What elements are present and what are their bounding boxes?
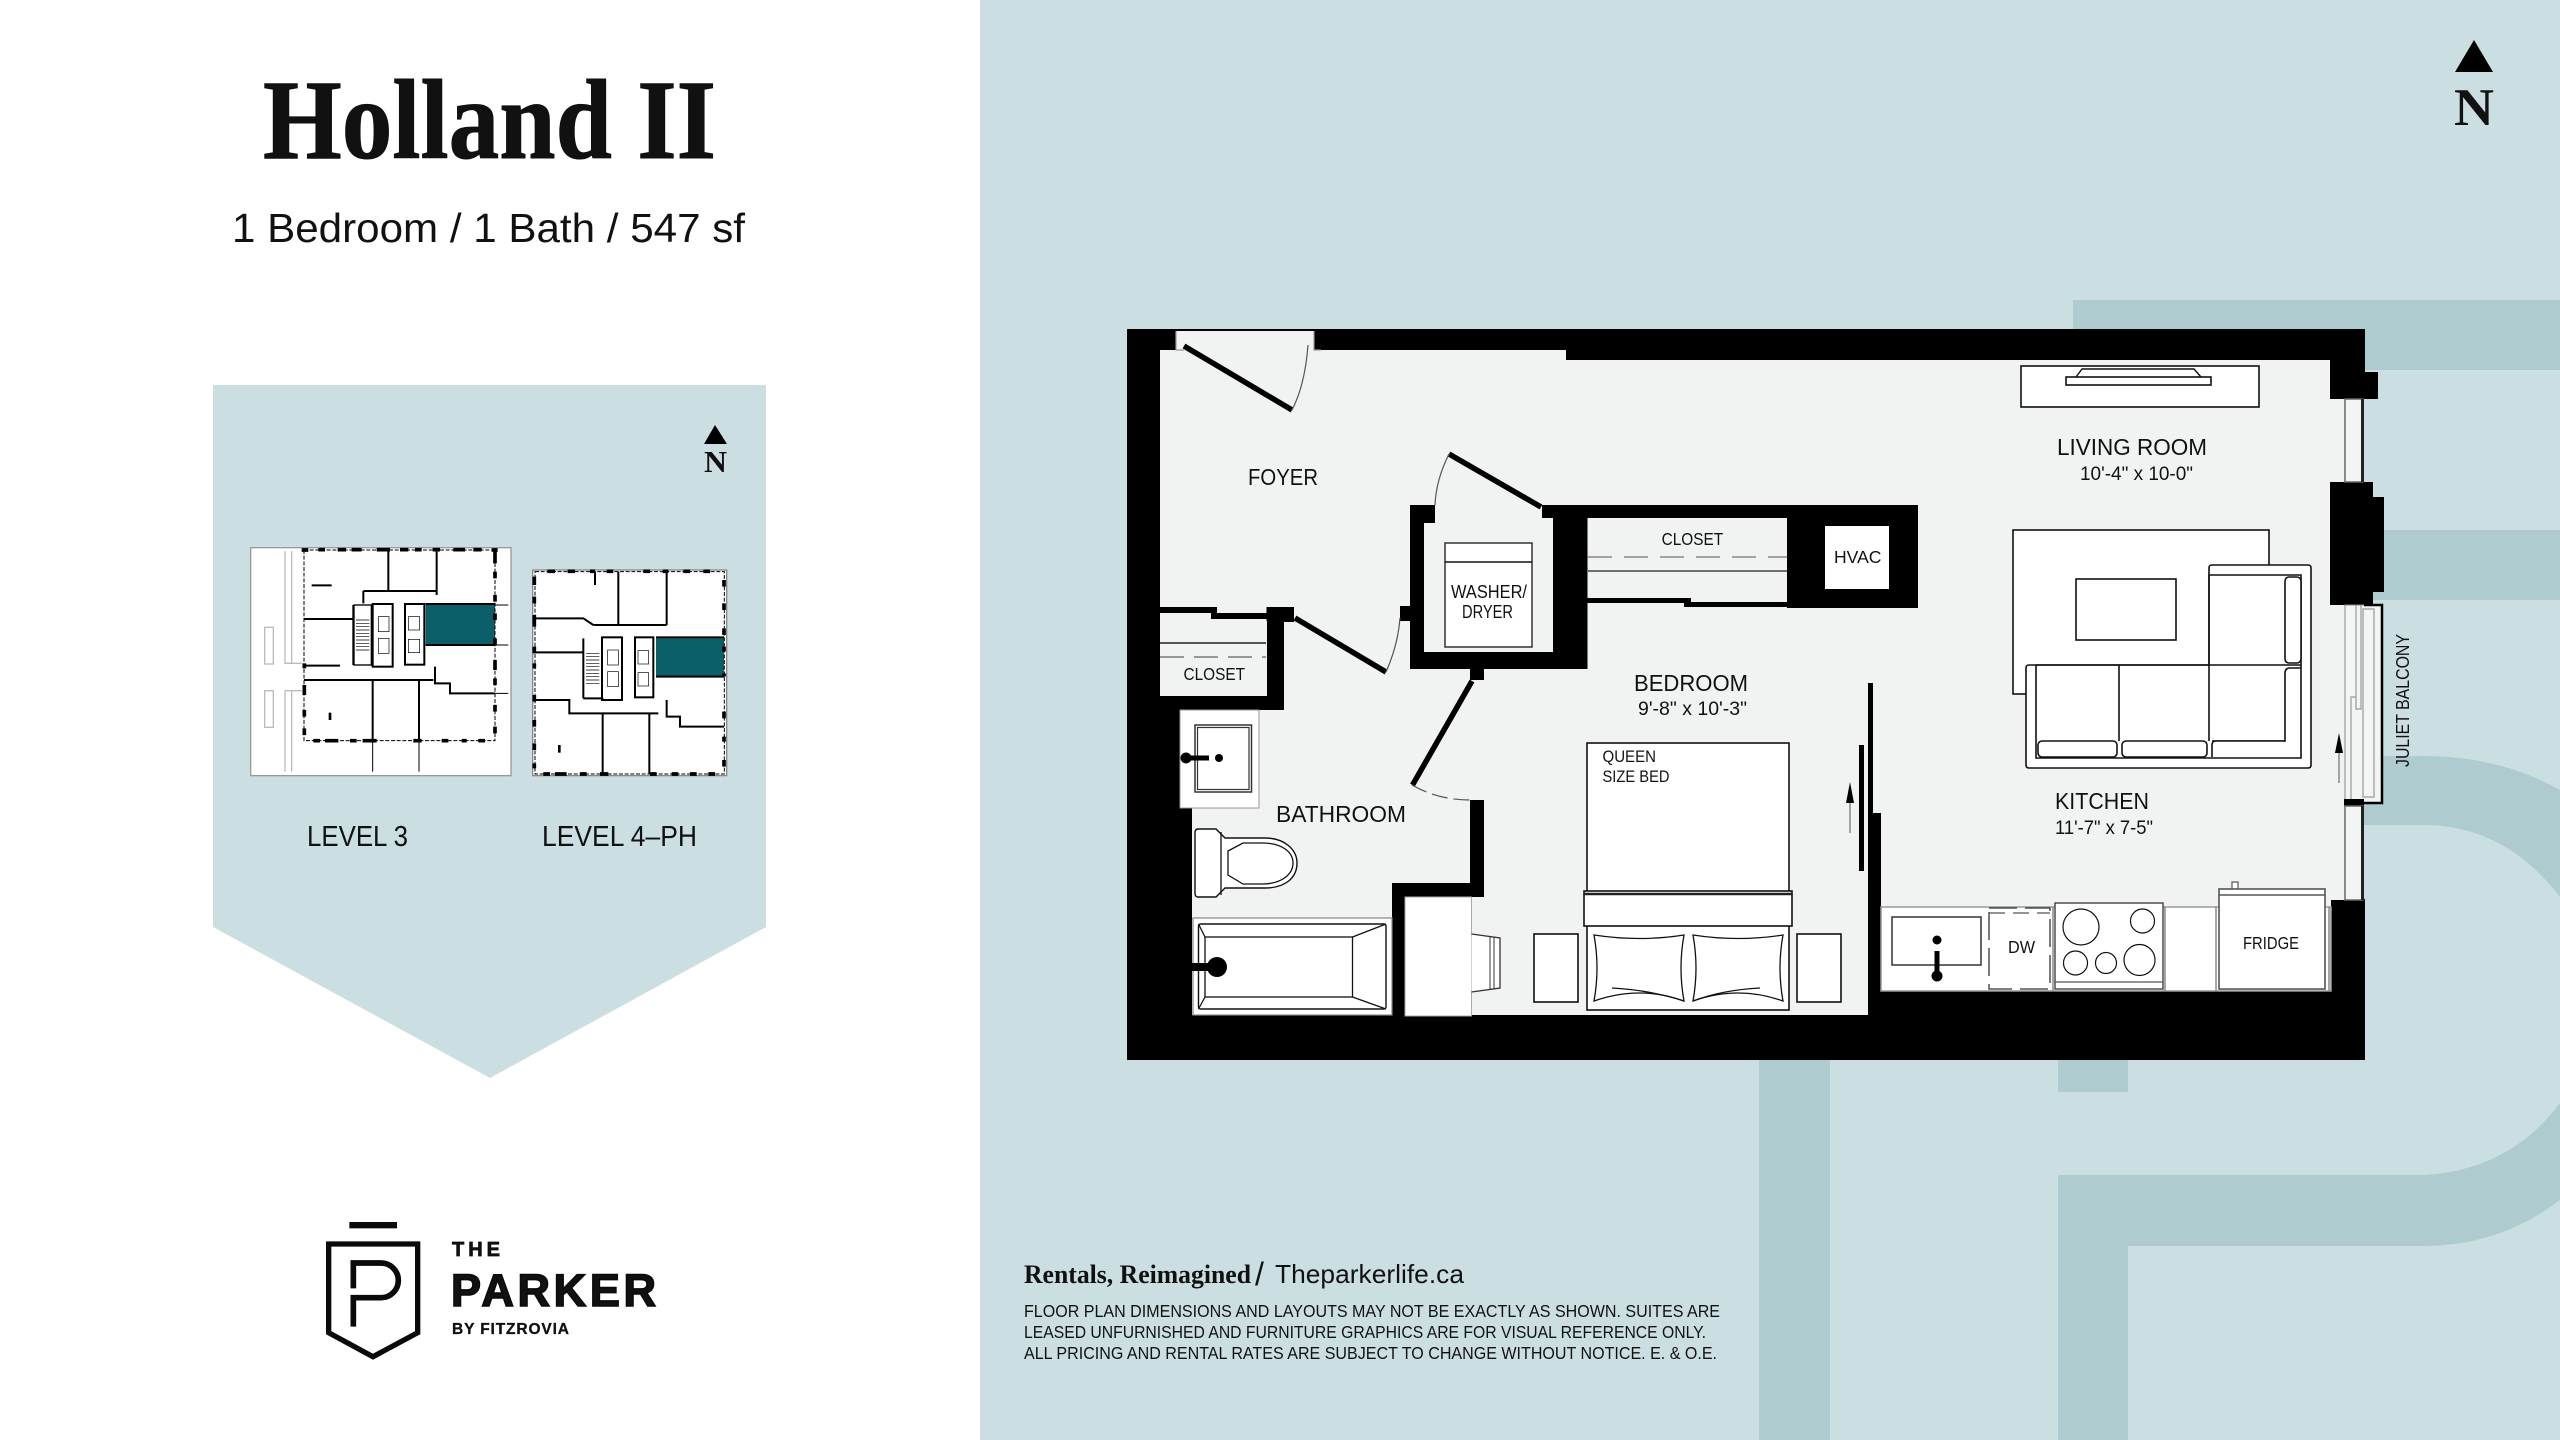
room labels: HVAC <box>1834 547 1882 567</box>
pillows <box>1594 935 1783 1001</box>
closet shelves <box>1160 518 1787 696</box>
logo: The Parker by Fitzrovia <box>329 1222 656 1357</box>
washer dryer: DRYER <box>1462 602 1513 622</box>
footer: tagline and website: Theparkerlife.ca <box>1275 1259 1465 1289</box>
footer: disclaimer <box>1024 1301 1720 1363</box>
kitchen counter <box>1881 882 2331 991</box>
room labels: 11'-7" x 7-5" <box>2055 818 2153 839</box>
icon: small north arrow <box>704 425 727 479</box>
subtitle: unit summary: 1 Bedroom / 1 Bath / 547 sf <box>232 205 746 251</box>
room floor area <box>1160 331 2345 1015</box>
windows and juliet balcony door <box>2344 399 2382 900</box>
footer: tagline and website: Rentals, Reimagined <box>1024 1260 1252 1289</box>
footer: disclaimer: FLOOR PLAN DIMENSIONS AND LAYOUTS MAY NOT BE EXACTLY AS SHOWN. SUITES ARE <box>1024 1301 1720 1321</box>
icon: large north arrow: N <box>2454 79 2494 137</box>
fridge: FRIDGE <box>2243 933 2299 953</box>
dishwasher <box>1989 908 2050 989</box>
wordmark: THE <box>452 1239 500 1261</box>
kitchen sink <box>1892 917 1981 982</box>
vanity and sink <box>1180 710 1259 808</box>
footer: tagline and website: / <box>1255 1256 1264 1292</box>
juliet balcony label: JULIET BALCONY <box>2393 634 2413 767</box>
room labels: KITCHEN <box>2055 788 2149 814</box>
key plan: level 4-PH <box>533 570 727 776</box>
room labels: 10'-4" x 10-0" <box>2080 464 2193 485</box>
footer: disclaimer: LEASED UNFURNISHED AND FURNITURE GRAPHICS ARE FOR VISUAL REFERENCE ONLY. <box>1024 1322 1706 1342</box>
icon: large north arrow <box>2454 40 2494 137</box>
bathtub <box>1192 918 1392 1015</box>
washer dryer <box>1445 543 1532 647</box>
interior walls <box>1160 505 1918 1016</box>
floor plan <box>1127 329 2413 1060</box>
icon: small north arrow: N <box>704 444 727 479</box>
queen bed <box>1584 743 1792 1010</box>
room labels: LIVING ROOM <box>2057 434 2207 460</box>
icon: shield monogram <box>329 1222 418 1357</box>
nightstands <box>1534 934 1841 1002</box>
room labels: CLOSET <box>1662 529 1723 549</box>
exterior walls <box>1127 329 2384 1060</box>
room labels: FOYER <box>1248 464 1318 490</box>
wordmark <box>451 1239 656 1338</box>
panel: key plan pennant <box>213 385 766 1078</box>
panel: right blue background with monogram watermark <box>980 0 2560 1440</box>
label: level 3: LEVEL 3 <box>307 821 408 853</box>
footer: disclaimer: ALL PRICING AND RENTAL RATES ARE SUBJECT TO CHANGE WITHOUT NOTICE. E. & O.E. <box>1024 1343 1717 1363</box>
toilet <box>1195 829 1297 897</box>
dishwasher: DW <box>2008 937 2035 957</box>
washer dryer: WASHER/ <box>1451 582 1527 602</box>
label: level 4-PH: LEVEL 4–PH <box>542 821 697 853</box>
wordmark: PARKER <box>451 1265 656 1316</box>
rug and coffee table <box>2013 530 2269 694</box>
room labels: CLOSET <box>1184 664 1245 684</box>
room labels: 9'-8" x 10'-3" <box>1638 699 1747 720</box>
key plan: level 3 <box>251 548 511 776</box>
doors <box>1176 331 1541 800</box>
stove <box>2055 903 2163 989</box>
room labels: BATHROOM <box>1276 801 1406 827</box>
footer: tagline and website <box>1024 1256 1465 1292</box>
panel: left white column <box>0 0 980 1440</box>
queen bed: QUEEN <box>1602 747 1656 766</box>
sliding door arrow: bedroom <box>1846 782 1854 833</box>
sectional sofa <box>2026 565 2311 768</box>
room labels: BEDROOM <box>1634 670 1748 696</box>
sliding door arrow: balcony <box>2335 733 2343 783</box>
queen bed: SIZE BED <box>1602 767 1670 786</box>
fridge <box>2219 882 2325 989</box>
wordmark: BY FITZROVIA <box>452 1321 569 1338</box>
linen cabinet and chair <box>1405 897 1500 1016</box>
room labels <box>1184 434 2207 839</box>
title: Holland II <box>263 58 716 183</box>
tv console <box>2021 366 2259 407</box>
